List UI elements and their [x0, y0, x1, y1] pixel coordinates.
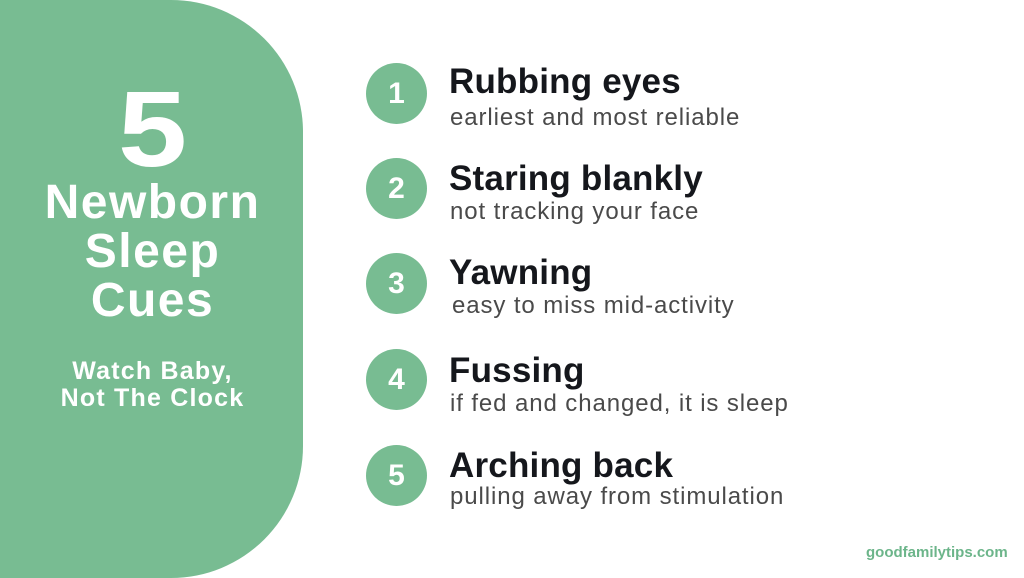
title: Newborn Sleep Cues: Sleep	[85, 225, 220, 278]
icon: number 1 circle	[366, 63, 427, 124]
icon: number 2 circle	[366, 158, 427, 219]
icon: number 3 circle	[366, 253, 427, 314]
heading: Yawning: Yawning	[449, 253, 592, 292]
heading: Fussing: Fussing	[449, 351, 585, 390]
text: earliest and most reliable: earliest and most reliable	[450, 104, 740, 131]
text: pulling away from stimulation: pulling away from stimulation	[450, 483, 784, 510]
icon: number 4 circle: 4	[388, 363, 405, 396]
icon: number 5 circle	[366, 445, 427, 506]
panel: green title panel	[0, 0, 303, 578]
icon: number 4 circle	[366, 349, 427, 410]
item 4	[366, 349, 789, 417]
item 5	[366, 445, 784, 510]
subtitle: Watch Baby, Not The Clock	[61, 357, 244, 412]
item 1	[366, 62, 740, 131]
big number 5: 5	[118, 68, 187, 189]
icon: number 2 circle: 2	[388, 172, 405, 205]
icon: number 3 circle: 3	[388, 267, 405, 300]
item 2	[366, 158, 703, 225]
icon: number 1 circle: 1	[388, 77, 405, 110]
text: easy to miss mid-activity: easy to miss mid-activity	[452, 292, 735, 319]
title: Newborn Sleep Cues: Cues	[91, 274, 214, 327]
text: not tracking your face: not tracking your face	[450, 198, 699, 225]
heading: Staring blankly: Staring blankly	[449, 159, 703, 198]
subtitle: Watch Baby, Not The Clock: Not The Clock	[61, 384, 244, 412]
icon: number 5 circle: 5	[388, 459, 405, 492]
text: if fed and changed, it is sleep: if fed and changed, it is sleep	[450, 390, 789, 417]
heading: Rubbing eyes: Rubbing eyes	[449, 62, 681, 101]
title: Newborn Sleep Cues: Newborn	[45, 176, 260, 229]
subtitle: Watch Baby, Not The Clock: Watch Baby,	[72, 357, 233, 385]
footer: website: goodfamilytips.com	[866, 544, 1008, 561]
title: Newborn Sleep Cues	[45, 176, 260, 327]
heading: Arching back: Arching back	[449, 446, 673, 485]
item 3	[366, 253, 735, 319]
